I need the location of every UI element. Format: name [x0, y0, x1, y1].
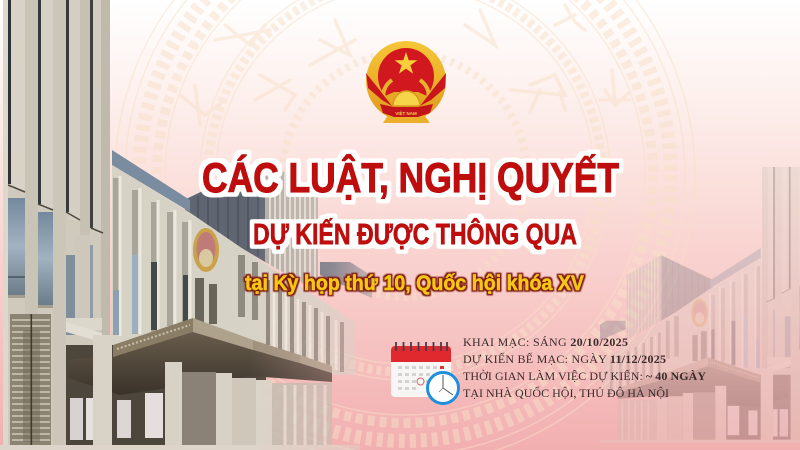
emblem star [395, 52, 417, 74]
subtitle: DỰ KIẾN ĐƯỢC THÔNG QUA: DỰ KIẾN ĐƯỢC THÔNG QUA [253, 217, 577, 251]
emblem rice sprigs [383, 80, 429, 97]
closing date: DỰ KIẾN BẾ MẠC: NGÀY 11/12/2025 [463, 351, 666, 366]
session line: tại Kỳ họp thứ 10, Quốc hội khóa XV: tại Kỳ họp thứ 10, Quốc hội khóa XV [245, 272, 584, 295]
photo: National Assembly building, faded right [592, 150, 800, 443]
emblem cogwheel [393, 91, 420, 106]
icon: calendar with clock [391, 342, 458, 404]
photo: National Assembly building, left [0, 0, 372, 450]
emblem ribbon [380, 104, 433, 117]
watermark: bronze drum pattern [115, 0, 695, 450]
emblem base [383, 112, 430, 123]
emblem side banners [366, 73, 446, 106]
working time: THỜI GIAN LÀM VIỆC DỰ KIẾN: ~ 40 NGÀY [463, 368, 706, 383]
title: CÁC LUẬT, NGHỊ QUYẾT: CÁC LUẬT, NGHỊ QUYẾT [202, 153, 619, 201]
national emblem of Vietnam [366, 41, 446, 123]
national emblem of Vietnam: VIỆT NAM [395, 109, 417, 116]
event details text [463, 335, 706, 400]
opening date: KHAI MẠC: SÁNG 20/10/2025 [463, 335, 628, 349]
venue: TẠI NHÀ QUỐC HỘI, THỦ ĐÔ HÀ NỘI [463, 385, 669, 400]
